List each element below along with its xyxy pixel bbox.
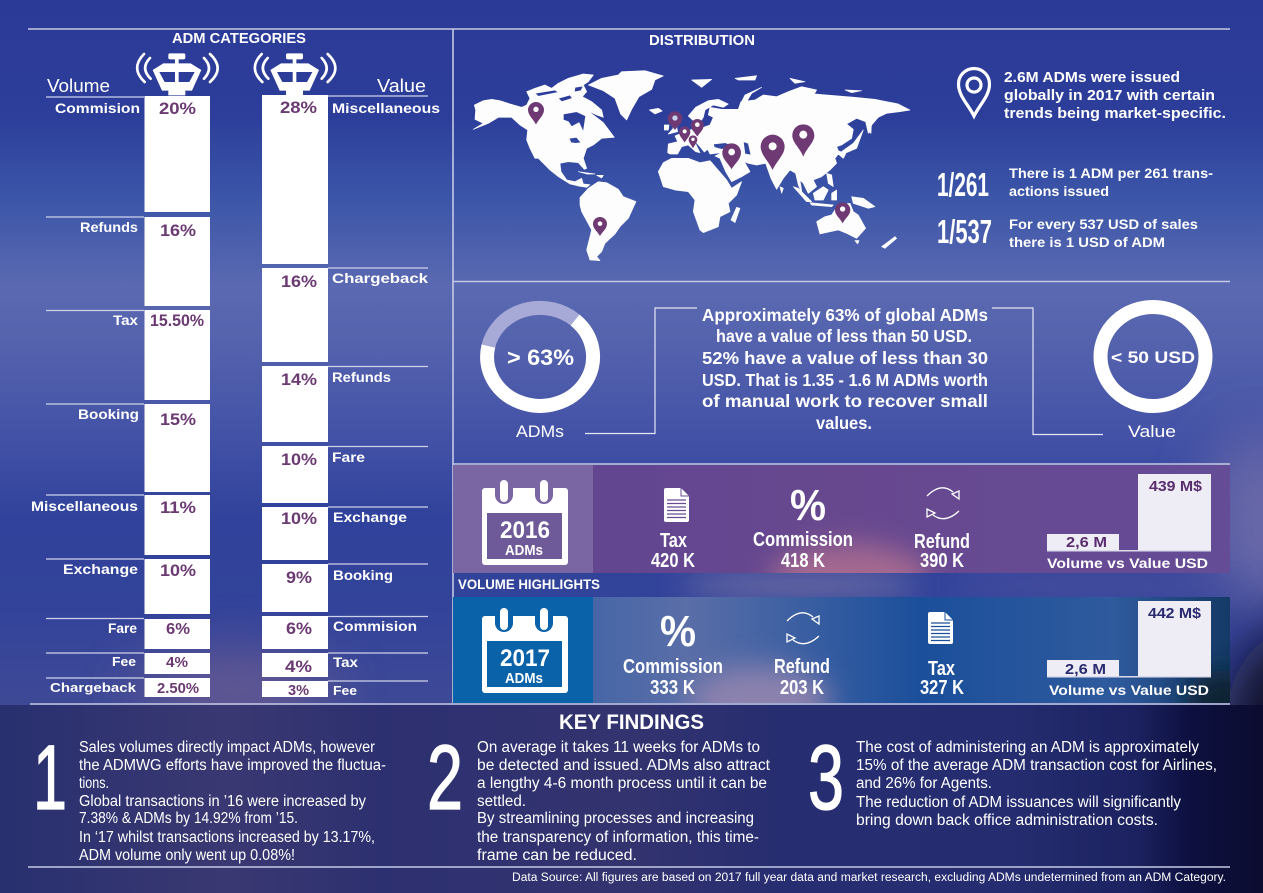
world map with pins [473, 71, 910, 261]
chart: volume stacked column: Refunds [80, 219, 138, 235]
text: issued globally [1004, 70, 1226, 122]
icon: refund arrows [787, 613, 819, 644]
stat: tax 327K [920, 658, 964, 699]
text: finding 3: and 26% for Agents. [856, 775, 992, 792]
stat: 1/537: 1/537 [937, 213, 992, 250]
icon: percent: % [790, 481, 826, 530]
text: summary: have a value of less than 50 USD. [716, 326, 972, 346]
text: issued globally: globally in 2017 with certain [1004, 88, 1215, 104]
value: >63%: > 63% [507, 345, 574, 370]
panel: key findings [33, 711, 1217, 864]
chart: volume vs value 2016: 2,6 M [1066, 534, 1107, 551]
stat: tax 420K: Tax [660, 530, 687, 552]
text: finding 2: By streamlining processes and increasing [477, 810, 754, 827]
chart: volume stacked column: Fare [108, 621, 137, 636]
label: ADMs: ADMs [516, 422, 564, 441]
map: continents [473, 71, 910, 261]
value: <50 USD: < 50 USD [1111, 348, 1195, 367]
chart: value stacked column: Refunds [332, 369, 391, 385]
chart: volume vs value 2017: 2,6 M [1065, 661, 1106, 678]
text: summary: USD. That is 1.35 - 1.6 M ADMs worth [702, 370, 988, 390]
panel: distribution [473, 33, 1226, 261]
text: 1 ADM per 261 transactions [1009, 165, 1213, 199]
chart: volume stacked column: 11% [160, 498, 196, 517]
chart: value stacked column: 6% [286, 619, 312, 638]
icon: document [928, 612, 953, 644]
stat: commission 333K: Commission [623, 656, 723, 678]
chart: under 50 USD donut [1100, 307, 1206, 406]
heading: ADM categories: ADM CATEGORIES [172, 31, 306, 47]
chart: volume stacked column: Exchange [63, 561, 138, 577]
heading: key findings: KEY FINDINGS [559, 711, 704, 734]
footer: data source: Data Source: All figures are based on 2017 full year data and market research, excluding ADMs undetermined from an ADM Category. [512, 872, 1226, 884]
connector right [992, 308, 1103, 434]
icon: location outline [958, 68, 990, 116]
connector left [585, 308, 697, 434]
icon: pin India [761, 135, 785, 170]
stat: refund 390K [914, 531, 970, 572]
icon: calendar 2017: 2017 [500, 645, 550, 672]
chart: value stacked column: Commision [333, 618, 417, 634]
chart: value stacked column: Chargeback [332, 270, 428, 286]
icon: pin Australia [835, 202, 850, 223]
panel: 2016 highlights [453, 465, 1230, 573]
text: finding 3: 15% of the average ADM transaction cost for Airlines, [856, 757, 1217, 774]
chart: volume stacked column: Miscellaneous [31, 498, 138, 514]
stat: tax 327K: 327 K [920, 677, 964, 699]
icon: calendar 2017: ADMs [505, 670, 543, 687]
icon: pin UK [668, 111, 682, 130]
chart: volume stacked column: 4% [166, 655, 188, 671]
chart: volume stacked column [31, 96, 210, 697]
icon: pin Italy [689, 135, 697, 148]
label: value: Value [1128, 422, 1176, 441]
panel: low value ADMs [487, 305, 1206, 441]
chart: volume vs value 2017: Volume vs Value USD [1049, 682, 1209, 698]
text: finding 2 [477, 739, 771, 864]
chart: volume stacked column: 16% [160, 221, 196, 240]
text: summary [702, 305, 988, 433]
chart: volume stacked column: 20% [159, 99, 196, 118]
chart: volume vs value 2017: 442 M$ [1148, 605, 1202, 622]
chart: value stacked column: 10% [281, 509, 317, 528]
chart: volume stacked column: Booking [78, 406, 139, 422]
stat: commission 418K: 418 K [781, 550, 825, 572]
stat: 1/261: 1/261 [937, 166, 989, 203]
text: finding 3: The reduction of ADM issuances will significantly [856, 794, 1181, 811]
text: finding 2: a lengthy 4-6 month process until it can be [477, 775, 767, 792]
stat: refund 203K [774, 656, 830, 699]
stat: commission 333K: 333 K [650, 677, 695, 699]
chart: volume stacked column: Commision [55, 100, 140, 116]
chart: value stacked column: 9% [286, 568, 312, 587]
stat: commission 418K: Commission [753, 529, 853, 551]
chart: volume vs value 2016: 439 M$ [1149, 478, 1203, 495]
icon: document [664, 488, 689, 522]
icon: calendar 2016 [482, 480, 568, 565]
text: summary: 52% have a value of less than 30 [702, 348, 988, 368]
text: finding 1: In ‘17 whilst transactions increased by 13.17%, [79, 829, 375, 846]
icon: pin North America [528, 102, 544, 125]
chart: value stacked column: 4% [285, 657, 312, 676]
stat: commission 333K [623, 656, 723, 699]
chart: volume vs value 2017 [1047, 601, 1211, 698]
text: finding 1: Sales volumes directly impact ADMs, however [79, 739, 375, 756]
stat: refund 390K: 390 K [920, 550, 964, 572]
label: volume: Volume [47, 76, 110, 96]
chart: volume stacked column: Chargeback [50, 680, 137, 695]
panel: key findings background [0, 705, 1263, 893]
numeral 2: 2 [427, 727, 463, 829]
icon: control tower volume [137, 53, 218, 95]
chart: volume stacked column: 10% [160, 561, 196, 580]
text: finding 3 [856, 739, 1217, 829]
chart: volume stacked column: 6% [166, 621, 190, 638]
chart: value stacked column: 16% [281, 272, 317, 291]
text: every 537 USD [1009, 216, 1198, 250]
text: summary: values. [816, 413, 872, 433]
text: 1 ADM per 261 transactions: There is 1 ADM per 261 trans- [1009, 165, 1213, 181]
text: finding 1: Global transactions in ’16 were increased by [79, 793, 366, 810]
stat: tax 327K: Tax [928, 658, 955, 680]
icon: calendar 2017 [482, 608, 568, 693]
chart: value stacked column: 3% [288, 682, 309, 699]
icon: pin China [792, 124, 814, 157]
chart: value stacked column: Miscellaneous [332, 100, 440, 116]
chart: value stacked column: 14% [281, 370, 317, 389]
text: every 537 USD: there is 1 USD of ADM [1009, 234, 1165, 250]
text: finding 3: The cost of administering an ADM is approximately [856, 739, 1199, 756]
icon: control tower value [255, 53, 335, 95]
text: finding 1: tions. [79, 775, 109, 792]
chart: volume stacked column: Fee [112, 654, 136, 669]
icon: pin Germany [691, 119, 704, 137]
text: finding 1: the ADMWG efforts have improved the fluctua- [79, 757, 386, 774]
text: finding 1 [79, 739, 386, 864]
text: every 537 USD: For every 537 USD of sales [1009, 216, 1198, 232]
text: finding 2: be detected and issued. ADMs also attract [477, 757, 771, 774]
chart: volume stacked column: Tax [113, 312, 138, 328]
chart: volume vs value 2016: Volume vs Value USD [1047, 555, 1208, 571]
stat: refund 203K: 203 K [780, 677, 824, 699]
chart: 63% donut [487, 308, 593, 406]
chart: value stacked column: Fare [332, 449, 365, 465]
text: finding 2: On average it takes 11 weeks for ADMs to [477, 739, 760, 756]
text: finding 2: settled. [477, 793, 526, 810]
text: finding 3: bring down back office administration costs. [856, 812, 1158, 829]
icon: calendar 2016: ADMs [505, 542, 543, 559]
text: finding 1: ADM volume only went up 0.08%! [79, 847, 295, 864]
text: finding 2: frame can be reduced. [477, 847, 637, 864]
chart: volume stacked column: 2.50% [157, 681, 199, 697]
text: finding 1: 7.38% & ADMs by 14.92% from ’15. [79, 810, 298, 827]
text: finding 2: the transparency of information, this time- [477, 829, 759, 846]
icon: percent: % [660, 607, 696, 656]
panel: 2017 highlights [453, 597, 1230, 703]
text: summary: of manual work to recover small [702, 391, 988, 411]
icon: calendar 2016: 2016 [500, 517, 550, 544]
text: issued globally: 2.6M ADMs were issued [1004, 70, 1180, 86]
text: 1 ADM per 261 transactions: actions issued [1009, 183, 1109, 199]
chart: value stacked column: Exchange [333, 509, 407, 525]
numeral 1: 1 [33, 727, 67, 829]
stat: tax 420K: 420 K [651, 550, 695, 572]
icon: refund arrows [927, 488, 959, 519]
stat: refund 203K: Refund [774, 656, 830, 678]
chart: value stacked column: 10% [281, 450, 317, 469]
chart: volume vs value 2016 [1047, 474, 1211, 571]
stat: tax 420K [651, 530, 695, 572]
chart: value stacked column: Tax [333, 654, 358, 670]
chart: volume stacked column: 15.50% [150, 311, 204, 330]
text: issued globally: trends being market-specific. [1004, 106, 1226, 122]
label: value: Value [377, 76, 426, 96]
icon: pin South America [593, 217, 607, 236]
numeral 3: 3 [808, 727, 844, 829]
icon: pin Middle East [722, 143, 741, 169]
text: summary: Approximately 63% of global ADMs [702, 305, 988, 325]
heading: volume highlights: VOLUME HIGHLIGHTS [458, 577, 600, 592]
chart: value stacked column: 28% [280, 98, 317, 117]
stat: commission 418K [753, 529, 853, 572]
heading: distribution: DISTRIBUTION [649, 33, 755, 49]
chart: value stacked column: Booking [333, 567, 393, 583]
icon: pin France [679, 126, 690, 143]
chart: volume stacked column: 15% [160, 410, 196, 429]
chart: value stacked column [262, 95, 440, 699]
panel: ADM categories [31, 31, 440, 699]
chart: value stacked column: Fee [333, 683, 357, 698]
stat: refund 390K: Refund [914, 531, 970, 553]
